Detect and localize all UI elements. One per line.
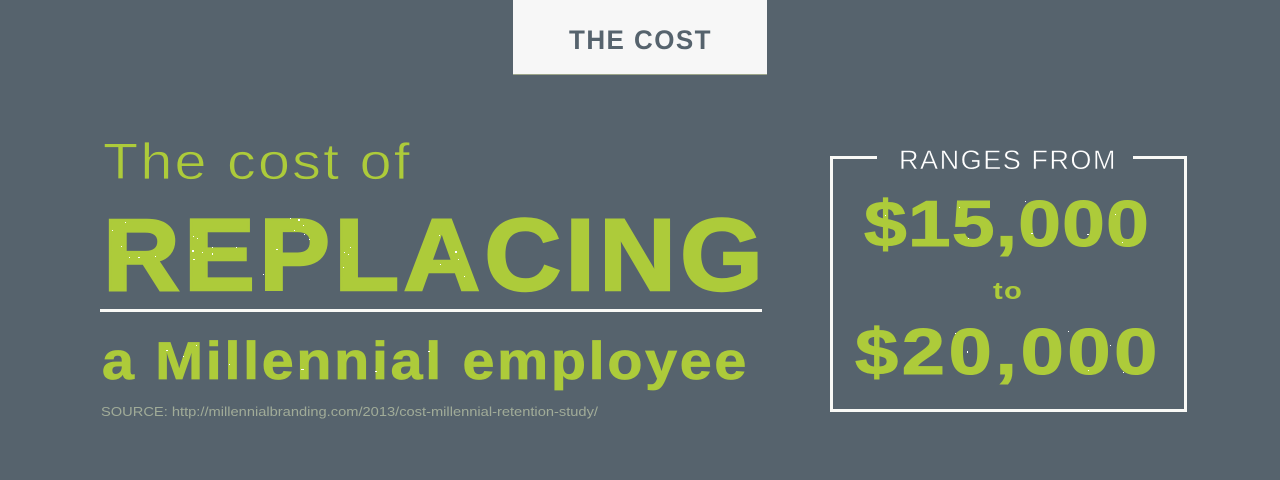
amount: 15,000: $15,000 — [864, 187, 1150, 260]
panel: salary range — [832, 145, 1186, 410]
headline line: the cost of: The cost of — [103, 133, 412, 190]
amount: 20,000: $20,000 — [855, 315, 1161, 388]
headline underline — [100, 309, 762, 312]
connector word: to: to — [993, 278, 1023, 305]
tab: the cost — [513, 0, 767, 75]
panel frame — [832, 158, 1186, 410]
panel heading: RANGES FROM — [899, 145, 1117, 175]
headline block — [100, 133, 767, 391]
headline line: a millennial employee: a Millennial employee — [102, 332, 749, 391]
source citation: SOURCE: http://millennialbranding.com/2013/cost-millennial-retention-study/ — [101, 404, 598, 419]
tab heading: THE COST — [569, 25, 712, 55]
headline line: replacing: REPLACING — [103, 198, 767, 312]
